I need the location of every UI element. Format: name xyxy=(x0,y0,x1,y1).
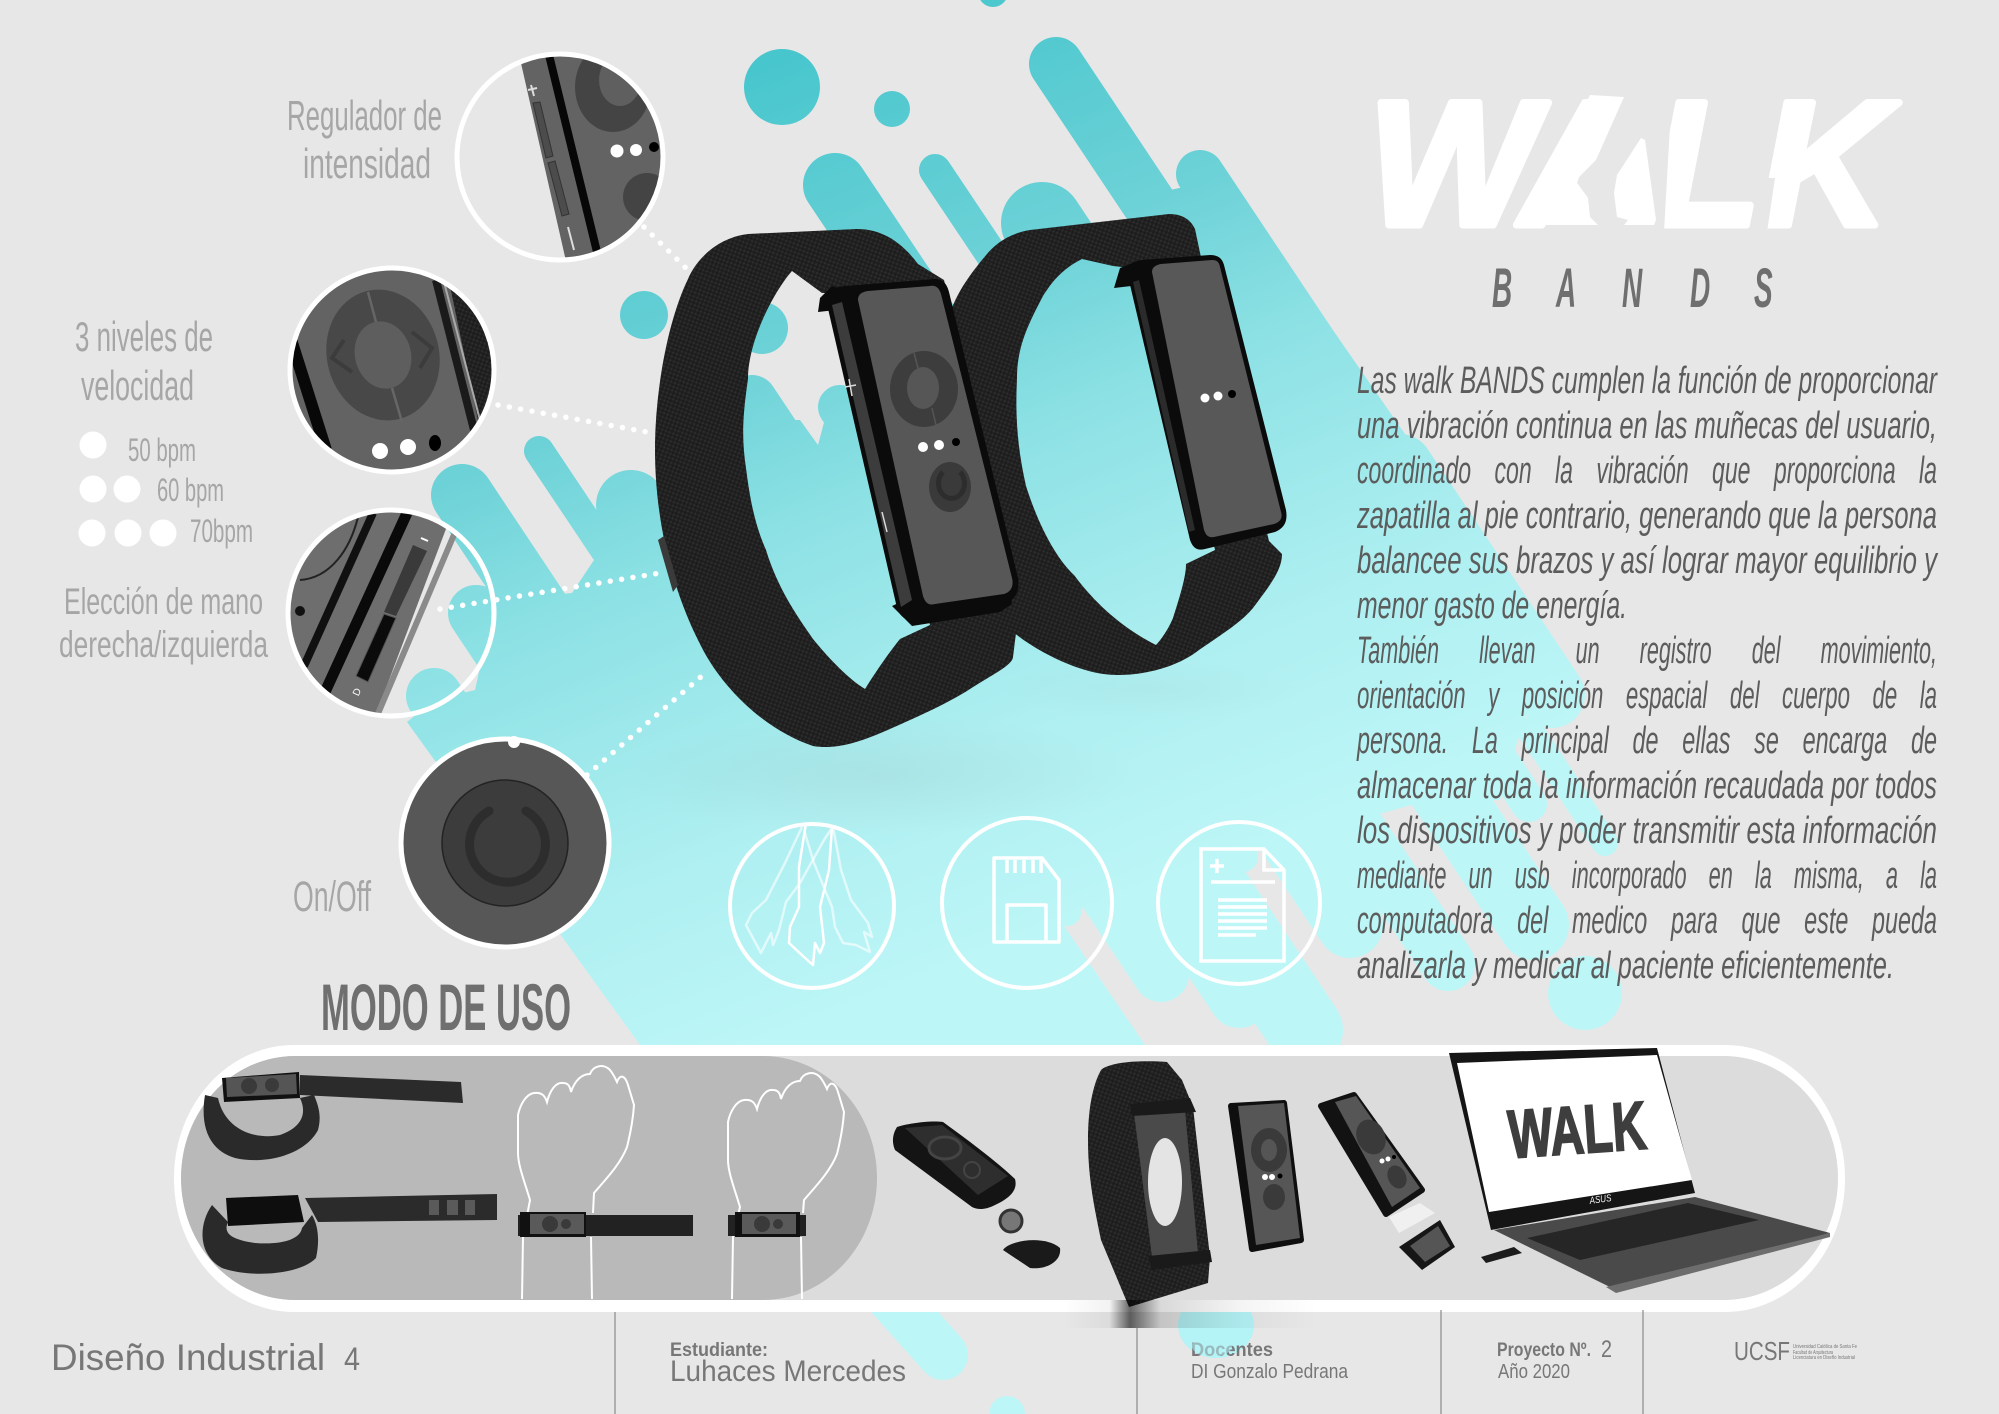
label: Elección de mano: derecha/izquierda xyxy=(59,624,268,665)
power button xyxy=(929,462,971,512)
cyan wash over Docentes heading xyxy=(1192,1335,1232,1357)
icon: feet in motion xyxy=(730,823,894,988)
description paragraph: menor gasto de energía. xyxy=(1357,585,1627,627)
label: Regulador de intensidad xyxy=(287,92,442,187)
dotted connector lines xyxy=(440,227,703,775)
direction pad xyxy=(890,351,958,427)
footer dividers xyxy=(615,1310,1643,1414)
label: 3 niveles de velocidad xyxy=(75,313,213,409)
footer: student: Luhaces Mercedes xyxy=(670,1355,906,1388)
label: 3 niveles de velocidad: 3 niveles de xyxy=(75,313,213,360)
logo A foot wedge xyxy=(1614,138,1656,225)
footer: project: 2 xyxy=(1601,1336,1612,1363)
footer: project: Proyecto Nº. xyxy=(1497,1340,1591,1361)
band: rear wristband xyxy=(930,214,1287,675)
strap tab xyxy=(658,536,678,592)
logo: WALK: WALK xyxy=(1368,64,1900,263)
band: front wristband xyxy=(655,229,1018,747)
logo A foot cut-out xyxy=(1577,90,1672,232)
device: front band module xyxy=(818,279,1018,626)
detail circle: intensity buttons xyxy=(454,52,666,262)
heading: Modo de uso: MODO DE USO xyxy=(321,970,571,1044)
footer: student xyxy=(670,1340,906,1388)
gap between L and K xyxy=(1758,178,1775,232)
detail circle: direction pad xyxy=(285,262,500,477)
footer: project: Año 2020 xyxy=(1498,1361,1570,1383)
floor shadow under bands xyxy=(620,660,1300,835)
band with opened holder xyxy=(1088,1061,1212,1307)
screen logo: WALK xyxy=(1506,1088,1649,1173)
device: rear band module xyxy=(1114,255,1287,550)
teal diagonal stripes background xyxy=(407,0,1622,1414)
footer: university: Facultad de Arquitectura xyxy=(1793,1350,1833,1356)
logo A left leg xyxy=(1528,95,1624,225)
footer: teachers: DI Gonzalo Pedrana xyxy=(1191,1361,1349,1383)
footer: university: Licenciatura en Diseño Industrial xyxy=(1793,1355,1855,1361)
footer: university: Universidad Católica de Santa Fe xyxy=(1793,1344,1857,1350)
description paragraph xyxy=(1356,360,1938,987)
speed legend: 50 bpm xyxy=(128,432,196,468)
label: Elección de mano xyxy=(59,581,268,665)
label: Elección de mano: Elección de mano xyxy=(64,581,263,622)
label: Regulador de intensidad: intensidad xyxy=(303,140,431,187)
speed legend: 70bpm xyxy=(190,513,253,549)
speed legend xyxy=(78,432,253,549)
subtitle: BANDS: BANDS xyxy=(1492,258,1773,320)
module with battery xyxy=(893,1121,1060,1268)
footer: teachers xyxy=(1191,1340,1349,1383)
footer: university xyxy=(1734,1336,1857,1366)
volume marks xyxy=(845,379,887,532)
band shadow below strip xyxy=(1064,1300,1318,1328)
module with usb connector xyxy=(1321,1095,1455,1270)
detail circle: power button xyxy=(401,736,609,947)
band open view, back xyxy=(203,1194,497,1274)
icon: medical document xyxy=(1158,822,1320,984)
laptop brand: ASUS xyxy=(1588,1193,1612,1207)
label: On/Off: On/Off xyxy=(293,873,372,921)
laptop xyxy=(1449,1048,1830,1293)
detail circle: hand selector xyxy=(280,505,494,725)
band open view, front xyxy=(204,1072,463,1160)
hand with closed band xyxy=(728,1073,844,1299)
footer: course: Diseño Industrial xyxy=(51,1337,325,1378)
detail circle: hand selector: D xyxy=(351,687,364,698)
icon: memory card xyxy=(942,818,1112,988)
footer: teachers: Docentes xyxy=(1191,1340,1273,1361)
footer: university: UCSF xyxy=(1734,1336,1790,1366)
footer: student: Estudiante: xyxy=(670,1340,768,1361)
hand with open band xyxy=(518,1066,693,1299)
cyan stripe end behind footer xyxy=(1178,1292,1254,1358)
speed legend: 60 bpm xyxy=(157,472,224,508)
status lights xyxy=(918,438,960,452)
label: Regulador de intensidad: Regulador de xyxy=(287,92,442,139)
footer: course: 4 xyxy=(344,1341,360,1377)
footer: project xyxy=(1497,1336,1612,1383)
label: 3 niveles de velocidad: velocidad xyxy=(81,362,194,409)
panel: usage strip xyxy=(174,1045,1845,1312)
module front view xyxy=(1231,1103,1301,1249)
